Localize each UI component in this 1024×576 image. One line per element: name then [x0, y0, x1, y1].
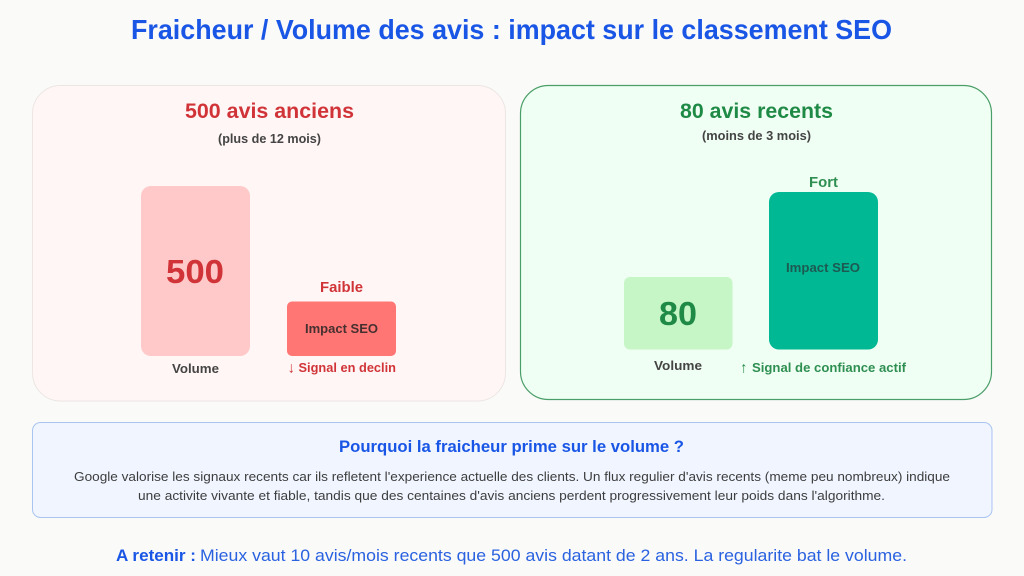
panel: 80 avis recents	[520, 86, 992, 400]
takeaway: Mieux vaut 10 avis/mois recents que 500 avis datant de 2 ans. La regularite bat le volume.	[200, 546, 907, 565]
panel heading: 80 avis recents	[680, 99, 833, 123]
bar: impact SEO fort	[769, 192, 878, 350]
explanation text: Google valorise les signaux recents car ils refletent l'experience actuelle des clients. Un flux regulier d'avis recents (meme peu nombreux) indique	[74, 469, 950, 484]
strength label: fort: Fort	[809, 174, 838, 191]
panel heading: Pourquoi la fraicheur prime sur le volume ?	[339, 438, 684, 456]
panel subheading: (moins de 3 mois)	[702, 128, 811, 143]
panel: pourquoi la fraicheur	[32, 422, 992, 518]
bar: volume 80: 80	[659, 295, 697, 332]
panel subheading: (plus de 12 mois)	[218, 131, 321, 146]
panel: 500 avis anciens	[32, 86, 506, 401]
bar: volume 80	[624, 277, 732, 350]
bar: volume 500	[141, 186, 250, 356]
explanation text: une activite vivante et fiable, tandis que des centaines d'avis anciens perdent progressivement leur poids dans l'algorithme.	[138, 488, 885, 503]
strength label: faible: Faible	[320, 279, 363, 296]
bar: impact SEO faible	[287, 302, 396, 356]
panel heading: 500 avis anciens	[185, 99, 354, 123]
signal: confiance actif: ↑	[740, 360, 748, 376]
signal: en declin: ↓	[288, 360, 295, 376]
signal: en declin: Signal en declin	[298, 360, 396, 375]
bar label: volume: Volume	[654, 358, 702, 373]
bar label: volume: Volume	[172, 361, 219, 376]
takeaway: A retenir :	[116, 546, 196, 565]
signal: confiance actif: Signal de confiance actif	[752, 360, 907, 375]
title: Fraicheur / Volume des avis : impact sur le classement SEO	[131, 14, 892, 45]
explanation text	[74, 469, 950, 503]
bar: impact SEO fort: Impact SEO	[786, 260, 860, 275]
bar: impact SEO faible: Impact SEO	[305, 321, 378, 336]
bar: volume 500: 500	[166, 253, 224, 290]
